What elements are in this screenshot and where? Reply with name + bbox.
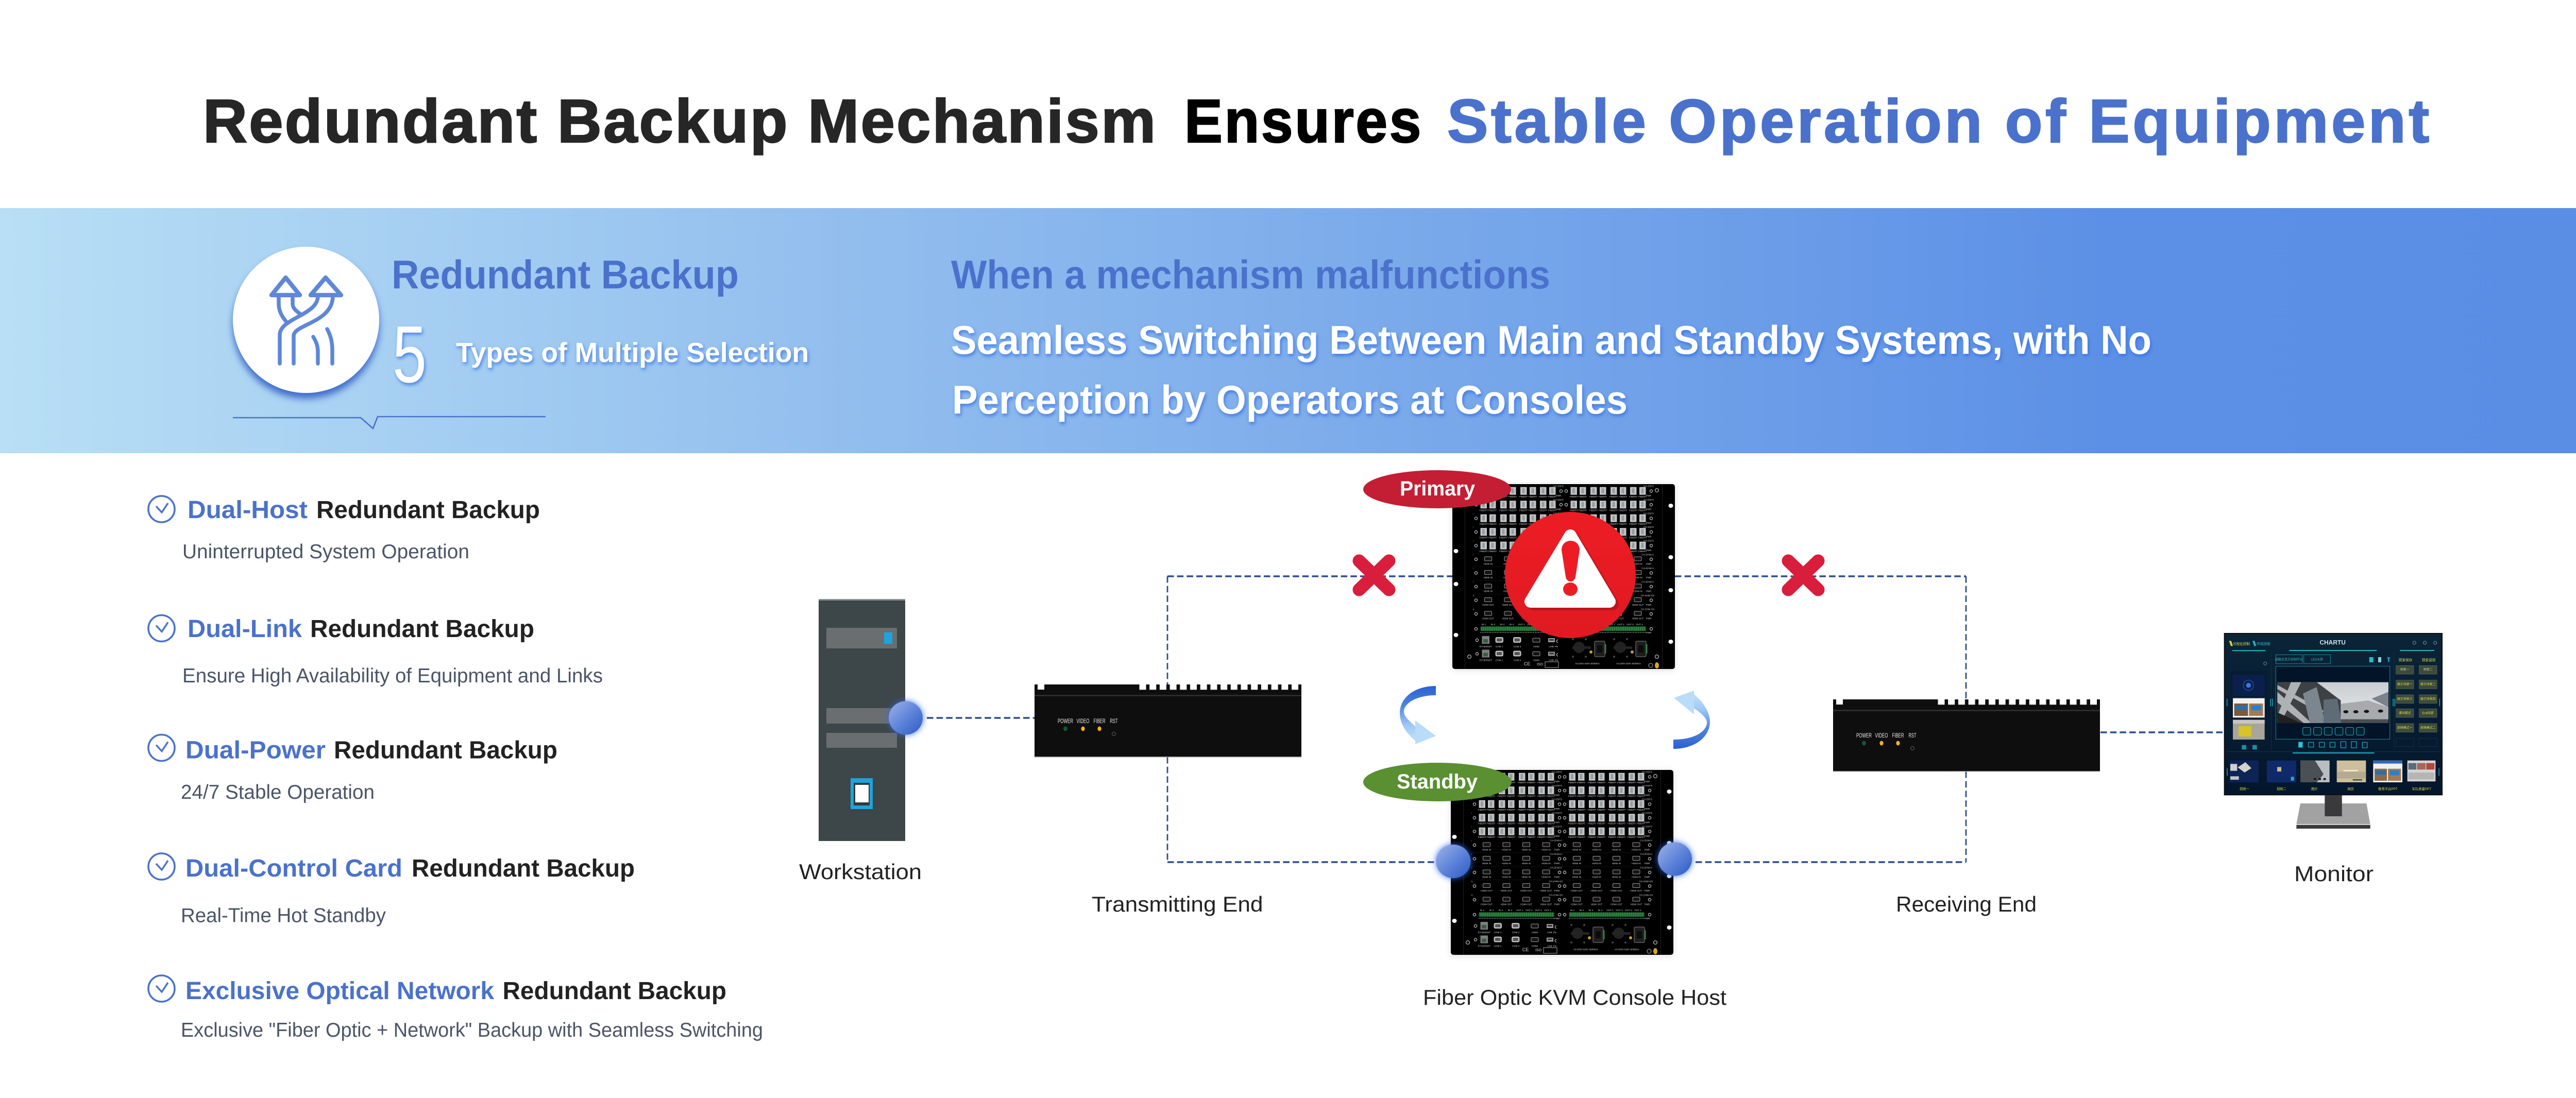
item: dual-control card [148,853,635,927]
bottom thumbnails: 视频二 [2277,786,2286,791]
primary KVM host chassis: AC100V-240V 50/60Hz [1616,662,1641,665]
workstation tower [819,599,905,841]
heading: when a mechanism malfunctions: When a mechanism malfunctions [951,252,1550,297]
title [203,87,2429,156]
subheading: types of multiple selection: Types of Multiple Selection [456,337,809,368]
primary KVM host chassis: ISO [1537,663,1544,666]
icon: right failure cross [1788,561,1818,590]
right preset buttons: 放映模式二 [2420,726,2436,730]
standby KVM host chassis [1451,770,1673,955]
receiving end device: RST [1908,733,1917,739]
item: dual-host: Dual-Host [188,496,308,524]
item: dual-link: Ensure High Availability of Equipment and Links [182,665,603,687]
right preset buttons: 预案一 [2400,667,2410,672]
transmitting end device: RST [1110,718,1118,725]
text: seamless switching statement [951,317,2151,422]
monitor stand [2296,795,2370,829]
right preset buttons: 预案调用 [2422,658,2435,662]
transmitting end device: POWER [1058,718,1073,725]
standby KVM host chassis: ISO [1535,949,1542,952]
monitor screen [2224,633,2443,795]
dashed connection lines [927,576,2223,862]
item: dual-control card: Dual-Control Card [185,855,402,882]
title: Stable Operation of Equipment [1447,87,2429,156]
standby KVM host chassis: AC100V-240V 50/60Hz [1573,948,1598,951]
text: seamless switching statement: Seamless Switching Between Main and Standby Systems, with No [951,317,2151,363]
banner band [0,208,2576,453]
label: fiber optic KVM console host: Fiber Optic KVM Console Host [1423,985,1726,1009]
monitor screen: CHARTU [2319,639,2346,646]
item: exclusive optical network [148,975,763,1041]
bottom thumbnails: 教育平台PPT [2378,786,2398,791]
right preset buttons: 展示场景二 [2420,682,2436,687]
badge: primary [1363,470,1511,508]
item: dual-host: Redundant Backup [316,496,540,524]
monitor screen: 环境控制 [2257,642,2270,646]
monitor screen: LED大屏 [2311,658,2323,662]
right preset buttons [2396,658,2437,746]
item: exclusive optical network: Exclusive "Fiber Optic + Network" Backup with Seamless Switching [181,1019,763,1041]
receiving end device [1833,699,2100,771]
item: dual-power: 24/7 Stable Operation [181,781,375,803]
transmitting end device: VIDEO [1077,718,1090,725]
title: Redundant Backup Mechanism [203,87,1156,156]
right preset buttons: 课间模式 [2399,711,2411,715]
connector dot: standby left [1436,845,1470,878]
primary KVM host chassis [1452,484,1675,669]
bottom thumbnails [2230,761,2435,791]
number 5: 5 [393,310,427,400]
text: seamless switching statement: Perception by Operators at Consoles [952,377,1628,422]
monitor screen: 可视化控制 [2233,642,2250,646]
transmitting end device: FIBER [1093,718,1106,725]
receiving end device: POWER [1856,733,1872,739]
item: dual-power: Dual-Power [185,736,326,764]
left thumbnails [2231,671,2267,749]
label: transmitting end: Transmitting End [1092,892,1263,916]
receiving end device: VIDEO [1875,733,1888,739]
bottom thumbnails: 军队质量PPT [2412,786,2431,791]
badge: standby: Standby [1397,770,1478,793]
item: dual-link: Dual-Link [188,615,302,643]
item: dual-power: Redundant Backup [334,736,557,764]
right preset buttons: 展示场景三 [2397,697,2413,701]
item: exclusive optical network: Exclusive Optical Network [185,977,494,1005]
item: dual-host: Uninterrupted System Operation [182,541,469,563]
right preset buttons: 展示场景一 [2397,682,2413,687]
bottom thumbnails: 图片 [2311,786,2318,791]
feature list [148,496,763,1041]
arrow: switch left [1400,686,1436,744]
right preset buttons: 放映模式一 [2397,726,2413,730]
receiving end device: FIBER [1892,733,1904,739]
underline with notch [233,417,546,428]
item: dual-power [148,734,557,803]
item: exclusive optical network: Redundant Backup [503,977,726,1005]
item: dual-control card: Real-Time Hot Standby [181,904,386,927]
label: monitor: Monitor [2294,862,2374,886]
monitor screen: 超融合显示控制平台 [2275,658,2303,662]
right preset buttons: 预案二 [2424,667,2433,672]
item: dual-link [148,615,603,687]
right preset buttons: 预案保存 [2399,658,2413,662]
badge: standby [1363,763,1512,801]
connector dot: standby right [1658,843,1692,876]
right preset buttons: 展示场景四 [2420,697,2436,701]
badge: primary: Primary [1400,477,1476,500]
item: dual-host [148,496,540,563]
right preset buttons: Exit控屏 [2422,711,2434,715]
bottom thumbnails: 网页 [2347,787,2354,791]
monitor [2224,633,2443,829]
label: workstation: Workstation [799,860,922,884]
heading: Redundant Backup: Redundant Backup [392,252,739,297]
transmitting end device [1035,684,1301,757]
standby KVM host chassis: CE [1522,947,1529,952]
icon: left failure cross [1359,561,1389,590]
connector dot: workstation [889,701,923,734]
item: dual-control card: Redundant Backup [412,855,635,882]
item: dual-link: Redundant Backup [310,615,534,643]
photo in viewer [2277,682,2388,723]
label: receiving end: Receiving End [1896,892,2037,916]
icon: warning alert [1505,512,1636,638]
primary KVM host chassis: CE [1524,661,1530,666]
primary KVM host chassis: AC100V-240V 50/60Hz [1575,662,1600,665]
bottom thumbnails: 视频一 [2240,786,2249,791]
icon: redundant paths in white circle [233,247,379,393]
title: Ensures [1184,87,1423,156]
arrow: switch right [1673,691,1710,749]
standby KVM host chassis: AC100V-240V 50/60Hz [1615,948,1639,951]
centre viewer [2276,655,2390,739]
